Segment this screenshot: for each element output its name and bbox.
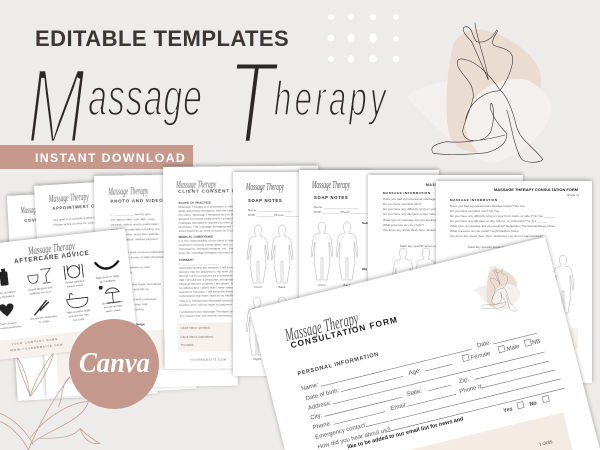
page: consultation form page 2: Do you have sensitive skin? No Yes: [450, 209, 499, 213]
page: photo and video release: I further agree that these recordings: [112, 282, 162, 287]
page: consultation form page 2: MASSAGE THERAPY CONSULTATION FORM: [494, 188, 578, 192]
page: client consent form: treatment currently being taken, and to provide: [179, 242, 243, 247]
card footer text: YOUR COMPANY NAME: [11, 337, 58, 346]
page: client consent form: the client. Massage Therapists do not diagnose: [178, 212, 243, 217]
page: appointment card: Please arrive on time for your visit: [53, 220, 100, 227]
page: client consent form: I, ______________________: [179, 262, 220, 266]
page: soap notes female: Obj: [362, 267, 367, 271]
front page: consultation form: [250, 237, 600, 450]
page: soap notes female: Front: [318, 283, 326, 287]
card heading: AFTERCARE ADVICE: [14, 250, 90, 265]
icon: heart: [0, 303, 15, 317]
page: client consent form: physician. The massage therapists are legally: [179, 224, 242, 229]
page: client consent form: should not be construed as a substitute for: [179, 273, 237, 278]
form fields: Address:: [308, 400, 332, 412]
page: appointment card: APPOINTMENT CARD: [52, 203, 106, 211]
instant download banner: [0, 145, 193, 169]
page: covid policy: Massage Therapy: [20, 204, 55, 215]
card footer text: [9, 336, 64, 352]
form heading: CONSULTATION FORM: [289, 314, 399, 350]
form fields: Yes: [503, 406, 513, 414]
page: massage information: Have you had a professional massage before?: [383, 197, 447, 201]
icon: bath: [66, 292, 89, 309]
page: soap notes female: Massage Therapy: [311, 180, 350, 191]
form logo: [474, 266, 520, 311]
card captions: heavy meal.: [67, 283, 84, 289]
page: soap notes front and back: Massage Therapy: [245, 182, 284, 193]
page: photo and video release: This consent shall continue indefinitely: [111, 250, 165, 255]
page: massage information: Are there any areas (feet, face, abdomen): [383, 228, 440, 232]
page: client consent form: YOURWEBSITE.COM: [190, 357, 227, 362]
decorative white dots: [328, 14, 399, 63]
form fields: Emergency contact:: [315, 422, 368, 441]
page: client consent form: conditions and I affirm that I have stated all: [179, 285, 238, 290]
form fields: Name:: [301, 382, 320, 392]
page: photo and video release: ____________ and will not: [111, 287, 149, 292]
page: soap notes front and back: Right: [253, 357, 261, 361]
page: soap notes female: Name: ____________________: [314, 205, 359, 209]
page: client consent form: Client Name (signature):: [180, 335, 214, 339]
page: photo and video release: may make while acting: [112, 307, 144, 312]
form fields: Female: [470, 351, 492, 362]
card captions: sun till all has: [103, 303, 123, 310]
page: client consent form: Massage Therapy is a profession in which: [178, 204, 236, 209]
page: consultation form page 2: Do you have any difficulty lying on your front, back, or side ? No Yes ______: [450, 214, 555, 218]
page: client consent form: understand that there shall be no liability on: [179, 293, 239, 298]
page: massage information: What type of massage are you seeking?: [383, 218, 438, 222]
page: photo and video release: PHOTO AND VIDEO RELEASE: [110, 197, 192, 204]
page: client consent form: Client Name (printed):: [180, 326, 211, 330]
form fields: like to be added to our email list for news and: [347, 416, 464, 450]
canva badge: Canva: [79, 348, 150, 379]
page: consultation form page 2: [436, 181, 592, 383]
page: photo and video release: pictures, videos and/or audio taken: [111, 222, 159, 227]
page: soap notes female: DOB: __________ Phone: __________: [314, 210, 369, 214]
icon: water bottle: [0, 268, 9, 286]
card captions: or yoga.: [38, 319, 50, 324]
card captions: too cold.: [73, 317, 85, 322]
page: appointment card: Massage Therapy: [48, 192, 89, 205]
leaf line art: [0, 353, 100, 450]
page: client consent form: CONSENT: [179, 258, 194, 262]
page: client consent form: Therapist:: [181, 343, 194, 347]
form fields: City:: [310, 413, 323, 422]
page: client consent form: described during the session, I will immediately: [179, 265, 244, 270]
page: photo and video release: I, ____________ hereby give: [111, 212, 151, 217]
page: client consent form: It is the responsibility of the client to keep the: [179, 238, 241, 243]
canva badge: [69, 319, 159, 409]
card captions: been used.: [105, 308, 121, 313]
page: consultation form page 2: Mark any specific areas you would like addressed: [468, 245, 536, 249]
card footer text: WWW.YOURWEBSITE.COM: [10, 342, 64, 352]
page: soap notes front and back: Name: ____________________: [248, 208, 293, 212]
page: massage information: [368, 175, 523, 380]
page: client consent form: strokes may be adjusted to my level of comfort: [179, 269, 243, 274]
icon: plate and cutlery: [64, 264, 83, 280]
form sheet: [250, 237, 600, 450]
page: consultation form page 2: Are there any areas (feet, face, abdomen) you do not want worked?: [450, 234, 543, 238]
page: client consent form: massage therapist is required to refer you: [178, 220, 236, 225]
page: consultation form page 2: Do you have any allergies to oils, lotions, or ointments? No Yes ______: [450, 219, 548, 223]
form fields: [301, 326, 567, 450]
page: appointment card: [34, 177, 197, 398]
page: massage information: Do you have sensitive skin?: [383, 202, 422, 206]
form fields: Date of birth:: [305, 388, 340, 402]
page: client consent form: I understand the Massage Therapist provides: [179, 309, 242, 314]
page: photo and video release: advertisements, press kits, website: [111, 232, 159, 237]
page: covid policy: [7, 189, 158, 401]
page: client consent form: SCOPE OF PRACTICE: [178, 201, 211, 205]
page: appointment card: Our goal is to provide quality care: [53, 215, 100, 222]
page: client consent form: Massage Therapy: [176, 180, 217, 191]
page: massage information: MASSAGE THERAPY: [426, 183, 469, 187]
page: client consent form: questions honestly. I will keep the therapist: [179, 289, 238, 294]
card captions: [0, 273, 125, 331]
heading: editable templates: EDITABLE TEMPLATES: [35, 26, 289, 51]
page: soap notes female: Back: [344, 283, 351, 287]
page: client consent form: allowed to provide treatment for a specific: [178, 216, 236, 221]
script title: M: [27, 47, 86, 167]
page: client consent form: that I should see a physician, chiropractor: [179, 277, 236, 282]
page: soap notes front and back: Left: [279, 357, 285, 361]
page: photo and video release: promotional materials including, but: [111, 227, 160, 232]
page: photo and video release: Massage Therapy: [108, 186, 149, 198]
card captions: Take time to relax: [95, 274, 120, 280]
card captions: Avoid eating a: [65, 279, 85, 285]
page: photo and video release: methods now known or later developed: [111, 255, 166, 260]
page: client consent form: avoid forget as an area to focus on if you: [179, 228, 235, 233]
page: soap notes front and back: Back: [279, 285, 286, 289]
line art figure with blobs: [407, 23, 552, 163]
card captions: Do gentle stretches: [30, 314, 58, 321]
script title: assage: [88, 69, 213, 127]
page: photo and video release: communications, without payment: [111, 237, 158, 242]
page: photo and video release: I hereby acknowledge: [113, 322, 145, 327]
page: client consent form: This is a Therapeutic Massage session only: [179, 298, 240, 303]
form script title: Massage Therapy: [282, 308, 360, 345]
instant download banner: INSTANT DOWNLOAD: [35, 151, 186, 165]
script title: T: [228, 37, 279, 169]
card captions: but not too hot: [69, 312, 89, 319]
form fields: State:: [406, 388, 423, 398]
page: massage information: Do you have any allergies to oils, lotions?: [383, 212, 440, 216]
card captions: caffeine for 12 h.: [29, 289, 53, 296]
form fields: Phone #:: [459, 384, 484, 395]
icon: beach umbrella: [99, 284, 120, 304]
icon: yoga stretch: [33, 300, 50, 315]
page: massage information: Mark any specific areas you: [400, 244, 439, 248]
form fields: Male: [506, 344, 521, 353]
icon: hammock: [95, 260, 119, 270]
page: soap notes front and back: Front: [254, 285, 262, 289]
page: consultation form page 2: What pressure do you prefer? Light Medium Deep: [450, 229, 519, 233]
page: client consent form: session and I will be liable for payment of: [179, 302, 236, 307]
section label: PERSONAL INFORMATION: [297, 352, 380, 377]
page: client consent form: any reason that she deems necessary. ____: [179, 313, 240, 318]
page: photo and video release: such recording.: [112, 270, 133, 275]
icon: coffee and martini: [27, 268, 52, 285]
page: photo and video release: I am of legal age and competent: [112, 297, 157, 302]
page: client consent form: physical ailment of which I am aware. Massage: [179, 281, 244, 286]
card captions: Do not sit in the: [102, 299, 124, 306]
page: soap notes female: [299, 170, 439, 376]
page: soap notes front and back: [233, 172, 373, 376]
card captions: Avoid alcohol and: [28, 285, 53, 292]
page: client consent form: keep the massage therapist informed of any: [179, 250, 239, 255]
form fields: Zip:: [459, 377, 470, 385]
form fields: No: [529, 400, 538, 408]
page: consultation form page 2: What type of massage are you seeking? Relaxation Therapeutic/Deep tissue: [450, 224, 555, 228]
card captions: or meditate.: [100, 278, 116, 284]
form pink panel: [409, 412, 573, 450]
page: massage information: MASSAGE INFORMATION: [383, 191, 431, 195]
page: photo and video release: [94, 174, 238, 388]
form fields: NB: [531, 339, 541, 347]
page: consultation form page 2: Have you had a professional massage before? No Yes: [450, 204, 525, 208]
card: aftercare advice: [0, 229, 138, 360]
script title: herapy: [274, 71, 389, 126]
page: client consent form: apply adjunctive therapies, with the intent: [178, 208, 235, 213]
page: soap notes front and back: SOAP NOTES: [248, 198, 282, 203]
page: client consent form: MEDICAL CONDITIONS: [179, 235, 213, 239]
page: client consent form: chiropractor, physical therapist, etc., that the: [179, 246, 240, 251]
page: soap notes female: SOAP NOTES: [314, 195, 348, 200]
page: covid policy: COVID POLICY: [24, 216, 62, 223]
card captions: Take a warm bath: [66, 308, 91, 315]
page: massage information: What pressure do you prefer?: [383, 223, 424, 227]
page: client consent form: CLIENT CONSENT FORM: [178, 188, 249, 194]
form fields: Age:: [408, 368, 422, 377]
form fields: Email:: [390, 402, 408, 412]
page: photo and video release: all rights to royalties or other: [112, 265, 151, 270]
page: consultation form page 2: MASSAGE INFORMATION: [450, 198, 498, 202]
card script title: Massage Therapy: [27, 238, 76, 258]
form pink panel: t clots: [539, 439, 554, 448]
page: client consent form: [163, 166, 320, 369]
form fields: Phone:: [312, 421, 333, 431]
page: photo and video release: the right to take, edit, alter, copy,: [111, 217, 155, 222]
page: soap notes front and back: DOB: __________ Phone: __________: [248, 213, 303, 217]
page: soap notes female: Subj: [362, 221, 369, 225]
page: photo and video release: decision which I may hold: [112, 302, 148, 307]
form fields: Date:: [477, 340, 492, 349]
page: massage information: Do you have any difficulty lying on your front: [383, 207, 444, 211]
page: consultation form page 2: (Page 2): [567, 193, 579, 197]
